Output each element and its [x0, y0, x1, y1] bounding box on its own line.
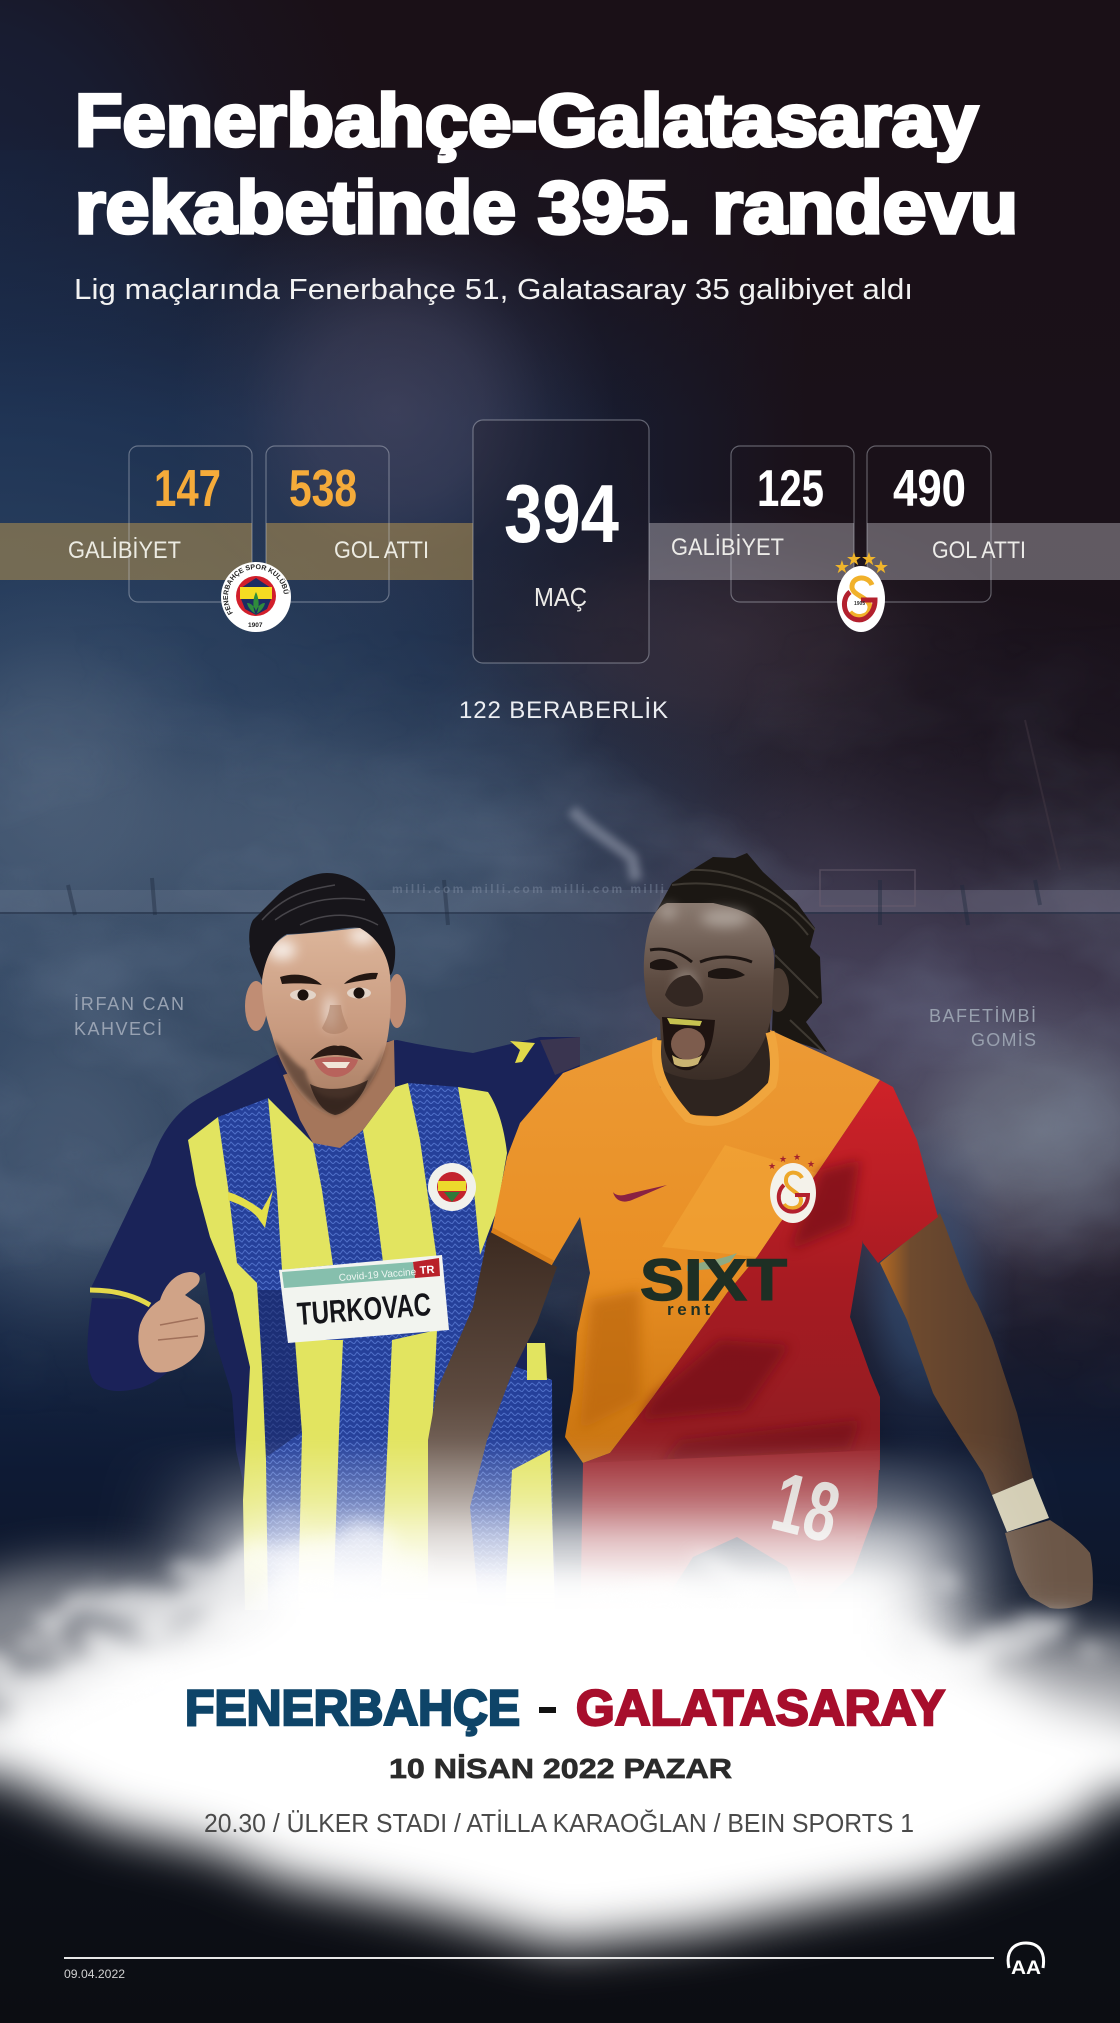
red shading: [640, 1160, 860, 1465]
FB wins: [68, 460, 221, 564]
icon: Galatasaray crest: ★: [834, 557, 850, 577]
lighter panel: [662, 1145, 817, 1257]
footer rule: [64, 1957, 994, 1959]
right arm: [880, 1213, 1033, 1495]
nike swoosh: [613, 1185, 667, 1202]
shirt crest: [428, 1163, 476, 1211]
puma logo: [228, 1190, 273, 1228]
icon: Fenerbahçe crest: [221, 562, 291, 632]
GS wins: 125: [757, 460, 824, 518]
hand: [138, 1272, 205, 1373]
mouth: [314, 1057, 358, 1077]
shirt crest: ★: [768, 1161, 776, 1171]
sponsor label: TURKOVAC: [296, 1286, 432, 1332]
shoulder marks: [510, 1037, 580, 1075]
blue stripes: [218, 1083, 553, 1610]
GS goals: GOL ATTI: [932, 537, 1026, 564]
total matches: 394: [504, 467, 619, 560]
sponsor label: [279, 1255, 449, 1343]
mouth: [662, 1017, 715, 1070]
icon: Galatasaray crest: [834, 549, 889, 632]
eyebrows: [280, 973, 378, 985]
player name: Bafetimbi Gomis: [929, 1006, 1036, 1050]
sponsor logo: SIXT: [640, 1248, 787, 1313]
icon: Galatasaray crest: ★: [846, 549, 862, 569]
shirt crest: ★: [779, 1154, 787, 1164]
shirt crest: ★: [807, 1159, 815, 1169]
undersleeve: [87, 1298, 184, 1391]
match date: 10 NİSAN 2022 PAZAR: [389, 1753, 732, 1784]
title: [75, 79, 1018, 249]
player: İrfan Can Kahveci: [87, 873, 580, 1620]
Galatasaray band: [649, 523, 1120, 580]
shirt crest: [768, 1152, 816, 1223]
nose: [322, 1005, 348, 1034]
smoke at foot of players: [0, 1440, 1120, 1945]
sponsor label: TR: [419, 1264, 435, 1277]
FB goals: [289, 460, 429, 564]
GS wins: GALİBİYET: [671, 534, 784, 561]
stats panel: [0, 419, 1120, 724]
dark side shading: [245, 1290, 305, 1460]
sleeve hem: [90, 1290, 150, 1305]
FB wins: 147: [154, 460, 221, 518]
hair: [249, 873, 395, 980]
forehead highlights: [660, 905, 749, 999]
fist: [1005, 1520, 1093, 1609]
nose: [665, 975, 703, 1007]
eyes: [290, 988, 371, 1000]
eyes: [650, 949, 752, 979]
face: [262, 928, 391, 1115]
match details: 20.30 / ÜLKER STADI / ATİLLA KARAOĞLAN / BEIN SPORTS 1: [204, 1808, 914, 1838]
FB goals: GOL ATTI: [334, 537, 429, 564]
stat boxes: [129, 420, 991, 663]
player name: İrfan Can Kahveci: İRFAN CAN: [74, 994, 184, 1014]
icon: AA logo: [1008, 1943, 1044, 1979]
icon: Fenerbahçe crest: FENERBAHÇE SPOR KULÜBÜ: [223, 564, 290, 616]
shorts: [580, 1450, 880, 1640]
GS goals: [893, 460, 1026, 564]
icon: Galatasaray crest: 1905: [854, 601, 865, 607]
player name: Bafetimbi Gomis: BAFETİMBİ: [929, 1006, 1036, 1026]
yellow stripes: [188, 1083, 555, 1610]
ears: [245, 974, 406, 1031]
subtitle: Lig maçlarında Fenerbahçe 51, Galatasaray 35 galibiyet aldı: [74, 274, 913, 306]
GS wins: [671, 460, 824, 561]
sleeve cuff: [492, 1230, 553, 1263]
icon: Galatasaray crest: ★: [861, 549, 877, 569]
neck: [283, 1040, 395, 1148]
GS goals: 490: [893, 460, 966, 518]
shorts: 18: [764, 1454, 849, 1561]
orange lower shading: [580, 1290, 640, 1430]
collar: [657, 1032, 774, 1122]
match teams heading: [185, 1680, 945, 1736]
sponsor label: Covid-19 Vaccine: [338, 1267, 417, 1284]
sponsor logo: rent: [667, 1300, 710, 1319]
neck: [658, 1020, 770, 1117]
total matches: MAÇ: [534, 582, 587, 612]
goatee: [310, 1080, 368, 1115]
player name: Bafetimbi Gomis: GOMİS: [971, 1030, 1036, 1050]
Fenerbahçe band: [0, 523, 473, 580]
player name: İrfan Can Kahveci: KAHVECİ: [74, 1019, 162, 1039]
player name: İrfan Can Kahveci: [74, 994, 184, 1039]
shirt: [492, 1030, 880, 1463]
shirt crest: ★: [793, 1152, 801, 1162]
ear: [767, 968, 789, 1012]
title: rekabetinde 395. randevu: [75, 166, 1018, 249]
moustache: [310, 1046, 363, 1060]
icon: Galatasaray crest: ★: [873, 557, 889, 577]
shirt body: [90, 1037, 580, 1620]
player: Bafetimbi Gomis: [428, 853, 1093, 1640]
total matches: [504, 467, 619, 612]
FB goals: 538: [289, 460, 357, 518]
wrist wrap: [992, 1478, 1049, 1532]
forehead highlights: [268, 928, 375, 1030]
title: Fenerbahçe-Galatasaray: [75, 79, 978, 162]
background: stadium and smoke: milli.com milli.com milli.com milli: [392, 882, 664, 896]
draws: 122 BERABERLİK: [459, 697, 668, 724]
beard: [273, 1040, 386, 1115]
icon: AA logo: AA: [1011, 1958, 1041, 1979]
left arm: [428, 1230, 557, 1600]
red panel: [583, 1080, 938, 1470]
FB wins: GALİBİYET: [68, 537, 181, 564]
match teams heading: FENERBAHÇE: [185, 1680, 520, 1736]
match teams heading: GALATASARAY: [576, 1680, 945, 1736]
icon: Fenerbahçe crest: 1907: [248, 622, 263, 629]
date stamp: 09.04.2022: [64, 1967, 125, 1981]
hair: dreadlocks: [650, 853, 827, 1052]
face: [644, 903, 774, 1080]
